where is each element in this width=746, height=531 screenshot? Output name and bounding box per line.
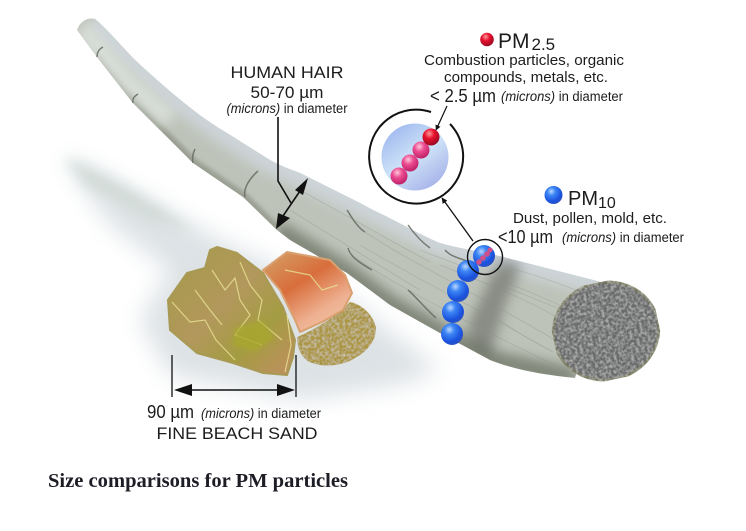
- label: human hair: 50-70 µm: [250, 83, 324, 102]
- label: PM2.5: [424, 30, 625, 106]
- label: fine beach sand: (microns) in diameter: [201, 406, 321, 421]
- arrow: from PM10 to magnified view: [442, 198, 473, 241]
- ground shadow: [62, 155, 440, 400]
- hair upper-edge highlight: [95, 19, 605, 283]
- label: PM2.5: (microns) in diameter: [501, 89, 623, 104]
- icon: PM10 particle chain: [441, 245, 495, 345]
- label: PM10: (microns) in diameter: [562, 230, 684, 245]
- magnifier ring on PM10 particle: [468, 240, 502, 274]
- label: PM2.5: compounds, metals, etc.: [444, 69, 608, 86]
- label: PM2.5: Combustion particles, organic: [424, 52, 625, 69]
- label: fine beach sand: 90 µm: [147, 402, 194, 422]
- label: human hair: HUMAN HAIR: [230, 63, 344, 82]
- hair cuticle scale lines: [97, 47, 470, 318]
- caption: Size comparisons for PM particles: [48, 470, 348, 492]
- label: PM2.5: < 2.5 µm: [430, 86, 496, 106]
- grain: yellow: [168, 247, 295, 375]
- magnified PM10 view: [369, 110, 463, 204]
- label: fine beach sand: FINE BEACH SAND: [156, 424, 318, 443]
- hair lower-edge shade, tip: [97, 57, 277, 230]
- hair shadow band: [468, 258, 522, 358]
- arrow: PM2.5 pointer: [436, 106, 447, 130]
- label: PM10: Dust, pollen, mold, etc.: [513, 210, 667, 227]
- cut end of hair: [544, 272, 668, 390]
- label: PM2.5: PM: [498, 30, 530, 53]
- hair lower-edge shade, body: [277, 230, 575, 378]
- human hair strand: [77, 18, 668, 390]
- label: PM2.5: 2.5: [532, 35, 555, 54]
- sand grains: [168, 247, 376, 375]
- hair tip highlight: [82, 28, 170, 120]
- icon: small PM2.5 chain on PM10 particle: [476, 248, 492, 265]
- label: PM10: 10: [598, 195, 616, 212]
- hair strand fine lines: [290, 190, 590, 365]
- label: human hair: (microns) in diameter: [226, 101, 348, 116]
- label: PM10: <10 µm: [498, 227, 553, 247]
- infographic: size comparison of PM particles: [49, 18, 684, 492]
- label: PM10: [498, 186, 684, 247]
- label: PM10: PM: [568, 188, 598, 210]
- label: fine beach sand: [147, 402, 321, 443]
- arrow: hair diameter: [276, 117, 308, 229]
- arrow: sand diameter: [172, 355, 296, 397]
- grain: olive: [297, 302, 376, 365]
- grain: orange: [263, 252, 352, 332]
- label: human hair: [226, 63, 348, 116]
